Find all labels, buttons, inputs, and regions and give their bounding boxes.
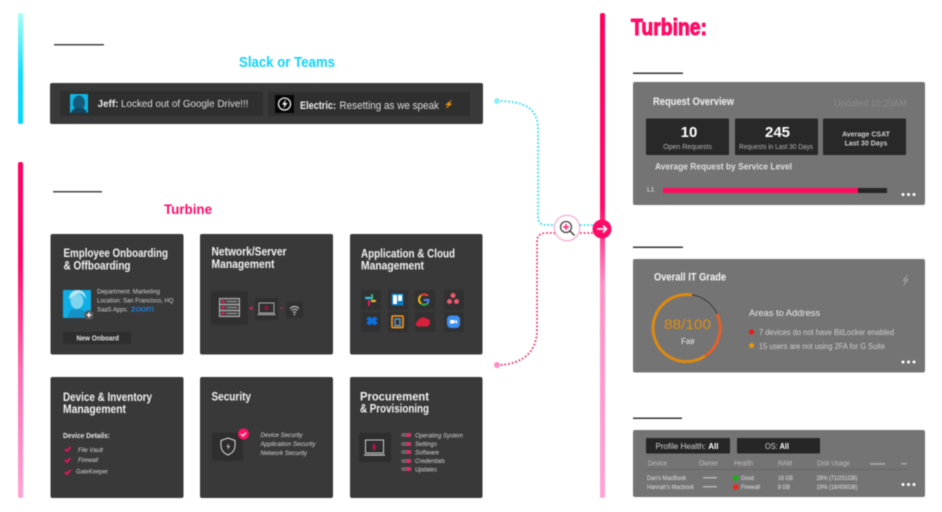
button: New Onboard: New Onboard <box>76 336 119 342</box>
security list: Application Security <box>260 441 316 448</box>
icon: employee photo <box>63 290 94 320</box>
table row: Dan's MacBook: 28% (71/251GB) <box>816 476 858 482</box>
grade score: 88/100 <box>664 316 711 332</box>
icon: Dropbox <box>366 316 378 326</box>
table row: Dan's MacBook <box>647 475 858 482</box>
connector: pink dotted line <box>497 233 593 365</box>
panel title: Management <box>212 257 274 271</box>
panel title: Security <box>212 390 251 404</box>
panel: Procurement <box>350 377 482 498</box>
panel title: Network/Server <box>212 245 287 259</box>
security list: Device Security <box>260 432 303 439</box>
app icon grid <box>361 290 464 332</box>
employee details: SaaS Apps: <box>97 306 128 314</box>
toggles list: Operating System <box>415 432 464 440</box>
message chip: Electric <box>268 92 470 116</box>
connector: cyan dotted line <box>497 101 593 225</box>
panel title: & Provisioning <box>360 402 429 416</box>
panel: Request Overview <box>633 82 925 205</box>
table row: Dan's MacBook: 16 GB <box>778 476 793 482</box>
panel title: & Offboarding <box>64 258 130 272</box>
panel title: Employee Onboarding <box>64 246 168 260</box>
icon: laptop <box>359 433 391 462</box>
message chip: Electric: Electric: <box>300 100 336 112</box>
employee details: Location: San Francisco, HQ <box>97 298 174 304</box>
table header: Owner <box>699 461 719 468</box>
employee details: Department: Marketing <box>97 289 160 296</box>
message chip: Jeff: Jeff: <box>98 98 118 110</box>
table header: Health <box>734 461 753 468</box>
table row: Dan's MacBook: Dan's MacBook <box>647 476 687 482</box>
icon: check badge <box>238 428 249 440</box>
security list: Network Security <box>260 450 308 457</box>
panel title: Device & Inventory <box>63 390 152 404</box>
icon: Electric logo <box>275 95 294 113</box>
stat: open requests <box>646 118 729 155</box>
toggles list: Settings <box>415 441 438 448</box>
panel: Network/Server <box>200 234 333 354</box>
heading: Turbine colon: Turbine: <box>631 14 707 40</box>
icon: server <box>211 291 248 325</box>
table header: RAM <box>778 461 792 468</box>
stat: open requests: Open Requests <box>663 144 712 151</box>
device details list: Device Details: <box>63 431 110 440</box>
bar chart: L1 <box>647 187 887 194</box>
stat: requests last 30 days <box>735 118 818 155</box>
icon: Jeff avatar <box>70 94 88 113</box>
areas to address <box>749 308 894 351</box>
panel: Security <box>200 377 333 498</box>
icon: bolt <box>902 274 909 287</box>
panel title: Management <box>63 402 126 416</box>
grade ring <box>653 294 720 362</box>
subheading: Average Request by Service Level <box>655 162 792 173</box>
icon: Creative Cloud <box>416 317 430 326</box>
table row: Hannah's Macbook <box>647 484 858 491</box>
table row: Hannah's Macbook: 8 GB <box>778 485 790 491</box>
updated timestamp: Updated 10:20AM <box>834 99 907 110</box>
central timeline bar <box>600 13 605 498</box>
message chip: Jeff <box>60 91 263 116</box>
more menu <box>902 193 916 196</box>
panel title: Application & Cloud <box>361 247 455 261</box>
connector dot <box>250 307 252 310</box>
stat: open requests: 10 <box>681 124 697 141</box>
toggles list <box>401 432 464 474</box>
icon: wifi <box>286 302 303 318</box>
stat: requests last 30 days: Requests in Last 30 Days <box>739 144 813 151</box>
employee details <box>97 289 174 314</box>
panel: Device & Inventory <box>50 377 184 498</box>
grade score <box>664 316 711 346</box>
areas to address: Areas to Address <box>749 308 820 319</box>
icon: Rippling box <box>392 316 403 328</box>
icon: lightning emoji <box>445 100 452 109</box>
areas to address: 7 devices do not have BitLocker enabled <box>759 328 894 337</box>
card title: Request Overview <box>653 96 734 108</box>
stat: average CSAT: Average CSAT <box>842 132 891 139</box>
grade score: Fair <box>681 337 695 346</box>
stat: requests last 30 days: 245 <box>765 124 790 141</box>
bar chart: L1: L1 <box>647 187 655 194</box>
cyan section bar <box>18 13 23 124</box>
employee details: zoom <box>131 304 154 314</box>
panel: Application & Cloud <box>350 234 482 354</box>
panel title: Management <box>361 259 424 273</box>
filter: Profile Health: Profile Health: All <box>656 441 718 451</box>
more menu <box>902 483 916 486</box>
table row: Hannah's Macbook: Firewall <box>741 485 760 491</box>
stat: average CSAT: Last 30 Days <box>845 140 888 147</box>
icon: magnifier <box>554 215 580 241</box>
heading: Slack or Teams: Slack or Teams <box>239 55 335 71</box>
device details list: GateKeeper <box>76 468 109 476</box>
icon: laptop <box>255 298 278 320</box>
panel: chat messages <box>50 83 483 124</box>
icon: Trello <box>392 294 404 306</box>
security list <box>260 432 316 457</box>
table header: Device <box>648 461 667 468</box>
pink section bar <box>18 162 23 498</box>
connector start: pink dot <box>494 362 500 368</box>
icon: arrow button <box>592 220 612 238</box>
device details list <box>63 431 110 476</box>
panel: device table <box>633 430 925 497</box>
areas to address: 15 users are not using 2FA for G Suite <box>759 342 886 351</box>
table row: Hannah's Macbook: Hannah's Macbook <box>647 485 695 491</box>
icon: shield <box>212 433 243 461</box>
panel title: Procurement <box>360 390 429 404</box>
toggles list: Software <box>415 450 439 456</box>
connector dot <box>280 308 283 309</box>
device details list: Firewall <box>78 457 98 464</box>
filter: OS <box>737 438 820 454</box>
filter: Profile Health <box>646 438 730 454</box>
icon: Asana <box>447 293 459 304</box>
icon: Slack <box>366 295 375 305</box>
icon: Google <box>419 294 428 305</box>
table header <box>648 461 907 468</box>
stat: average CSAT <box>823 118 906 155</box>
table row: Hannah's Macbook: 19% (18/456GB) <box>816 485 858 491</box>
connector start: cyan dot <box>494 98 500 104</box>
icon: Zoom <box>447 316 460 328</box>
table header: Disk Usage <box>817 461 850 468</box>
toggles list: Credentials <box>415 458 446 465</box>
panel: Overall IT Grade <box>633 259 925 372</box>
toggles list: Updates <box>415 466 438 474</box>
message chip: Jeff: Locked out of Google Drive!!! <box>121 98 248 110</box>
heading: Turbine: Turbine <box>164 202 212 217</box>
table row: Dan's MacBook: Good <box>741 476 754 482</box>
filter: OS: OS: All <box>765 441 789 451</box>
more menu <box>902 360 916 364</box>
panel: Employee Onboarding <box>50 234 184 354</box>
device details list: File Vault <box>78 447 104 454</box>
card title: Overall IT Grade <box>654 272 726 284</box>
message chip: Electric: Resetting as we speak <box>340 100 439 112</box>
